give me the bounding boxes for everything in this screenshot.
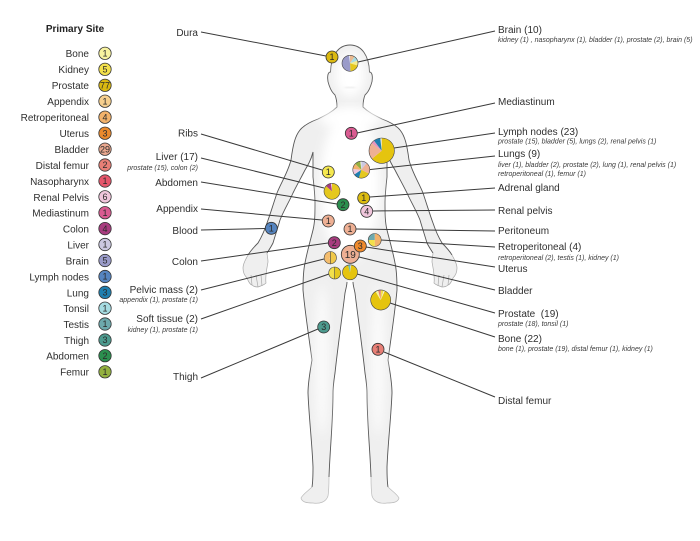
marker: renal pelvis: [361, 205, 373, 217]
label: prostate: Prostate (19): [498, 309, 559, 320]
legend item: distal femur: 2: [102, 160, 108, 170]
legend item: lymph nodes: [29, 270, 111, 284]
label: blood: Blood: [172, 226, 198, 237]
legend item: brain: [66, 254, 111, 268]
legend item: uterus: Uterus: [60, 129, 89, 140]
label: soft tissue: [128, 314, 198, 334]
legend item: femur: 1: [102, 367, 108, 377]
legend item: lung: [67, 286, 111, 300]
legend item: bone: [66, 47, 111, 60]
legend item: testis: [63, 318, 111, 331]
marker: colon: [328, 237, 340, 249]
label: liver: Liver (17): [156, 152, 198, 163]
legend item: retroperitoneal: 4: [102, 112, 108, 122]
marker: appendix: [322, 215, 334, 227]
marker: distal femur: 1: [375, 344, 381, 354]
legend item: lymph nodes: Lymph nodes: [29, 272, 89, 284]
label: adrenal gland: Adrenal gland: [498, 183, 560, 194]
marker: thigh: [318, 321, 330, 333]
leader lines: [201, 31, 495, 397]
marker: bladder: 19: [345, 250, 356, 261]
label: bone: [498, 334, 653, 353]
legend item: uterus: [60, 127, 111, 140]
legend item: colon: 4: [102, 224, 108, 234]
label: retroperitoneal: retroperitoneal (2), testis (1), kidney (1): [498, 255, 619, 262]
legend item: tonsil: 1: [102, 303, 108, 313]
label: retroperitoneal: [498, 242, 619, 262]
legend item: tonsil: Tonsil: [63, 304, 89, 315]
label: ribs: Ribs: [178, 128, 198, 140]
legend title: Primary Site: [46, 24, 105, 35]
legend item: colon: [63, 222, 111, 236]
label: brain: [498, 25, 693, 44]
legend item: mediastinum: 1: [102, 208, 108, 218]
marker: adrenal gland: [358, 192, 370, 204]
legend item: colon: Colon: [63, 224, 89, 236]
legend item: kidney: Kidney: [58, 65, 89, 76]
left labels: [119, 28, 198, 383]
marker: dura: 1: [329, 52, 335, 62]
label: appendix: Appendix: [156, 204, 198, 215]
legend item: prostate: [52, 79, 111, 92]
marker: blood: 1: [269, 224, 274, 234]
legend item: prostate: 77: [100, 80, 110, 90]
legend item: thigh: Thigh: [64, 336, 89, 347]
marker: thigh: 3: [321, 322, 326, 332]
legend item: bladder: 29: [100, 144, 110, 154]
marker: ribs: [322, 166, 334, 178]
legend item: lung: Lung: [67, 288, 89, 300]
label: abdomen: Abdomen: [155, 178, 198, 189]
marker: renal pelvis: 4: [364, 206, 369, 216]
legend item: appendix: 1: [102, 96, 108, 106]
pie: brain: [342, 55, 358, 71]
legend item: renal pelvis: [33, 191, 111, 204]
legend item: thigh: [64, 334, 111, 347]
marker: mediastinum: [345, 127, 357, 139]
legend item: brain: Brain: [66, 256, 89, 268]
marker: distal femur: [372, 343, 384, 355]
label: prostate: prostate (18), tonsil (1): [497, 321, 568, 328]
legend item: liver: 1: [102, 240, 108, 250]
label: soft tissue: kidney (1), prostate (1): [128, 327, 198, 334]
label: bladder: Bladder: [498, 286, 533, 297]
legend item: bone: 1: [102, 48, 108, 58]
legend item: appendix: Appendix: [47, 97, 89, 108]
legend item: femur: Femur: [60, 368, 90, 378]
label: pelvic mass: [119, 285, 198, 304]
numbered site markers: [265, 51, 384, 355]
marker: peritoneum: 1: [347, 224, 353, 234]
legend item: mediastinum: [32, 206, 111, 220]
label: prostate: [497, 309, 568, 328]
label: pelvic mass: appendix (1), prostate (1): [119, 297, 198, 304]
label: pelvic mass: Pelvic mass (2): [130, 285, 198, 296]
legend item: bladder: Bladder: [55, 145, 90, 156]
pie: retroperitoneal: [368, 234, 381, 246]
marker: mediastinum: 1: [349, 128, 354, 138]
legend item: brain: 5: [102, 256, 108, 266]
marker: bladder: [341, 245, 359, 263]
marker: peritoneum: [344, 223, 356, 235]
legend item: retroperitoneal: Retroperitoneal: [21, 113, 89, 124]
legend item: mediastinum: Mediastinum: [32, 208, 89, 220]
legend item: renal pelvis: Renal Pelvis: [33, 193, 89, 204]
label: lungs: retroperitoneal (1), femur (1): [498, 171, 586, 178]
label: lymph nodes: [497, 127, 656, 146]
pie: bone: [367, 287, 394, 313]
label: liver: [126, 152, 198, 172]
legend item: lymph nodes: 1: [102, 272, 108, 282]
legend item: testis: Testis: [63, 320, 89, 331]
legend item: abdomen: [46, 350, 111, 362]
legend item: nasopharynx: Nasopharynx: [30, 177, 89, 188]
legend item: liver: [67, 238, 111, 252]
legend item: prostate: Prostate: [52, 81, 89, 92]
label: lymph nodes: prostate (15), bladder (5), lungs (2), renal pelvis (1): [497, 138, 656, 146]
legend item: distal femur: Distal femur: [36, 161, 90, 172]
pie: lymph nodes: [369, 138, 394, 163]
label: retroperitoneal: Retroperitoneal (4): [498, 242, 581, 253]
marker: abdomen: 2: [340, 200, 346, 210]
legend item: distal femur: [36, 159, 111, 172]
marker: blood: [265, 222, 277, 234]
label: peritoneum: Peritoneum: [498, 226, 549, 237]
label: thigh: Thigh: [173, 372, 198, 383]
pie: lungs: [353, 161, 370, 178]
label: renal pelvis: Renal pelvis: [498, 206, 552, 217]
label: brain: kidney (1) , nasopharynx (1), bladder (1), prostate (2), brain (5): [498, 37, 693, 44]
legend item: nasopharynx: [30, 175, 111, 188]
legend item: bladder: [55, 143, 111, 156]
legend item: abdomen: 2: [102, 351, 108, 361]
label: lymph nodes: Lymph nodes (23): [498, 127, 578, 138]
marker: appendix: 1: [326, 216, 331, 226]
label: lungs: liver (1), bladder (2), prostate (2), lung (1), renal pelvis (1): [498, 162, 676, 169]
legend item: tonsil: [63, 302, 111, 315]
legend item: testis: 1: [102, 319, 108, 329]
legend item: uterus: 3: [102, 128, 108, 138]
label: mediastinum: Mediastinum: [498, 97, 555, 108]
marker: adrenal gland: 1: [361, 193, 366, 203]
legend item: thigh: 3: [102, 335, 108, 345]
label: distal femur: Distal femur: [498, 396, 552, 407]
label: lungs: Lungs (9): [498, 149, 540, 160]
legend item: liver: Liver: [67, 240, 90, 252]
legend item: femur: [60, 366, 111, 378]
label: soft tissue: Soft tissue (2): [136, 314, 198, 325]
marker: uterus: [354, 240, 366, 252]
pie: soft tissue: [329, 267, 341, 279]
label: bone: bone (1), prostate (19), distal femur (1), kidney (1): [498, 346, 653, 353]
label: dura: Dura: [176, 28, 198, 39]
pie charts: [324, 55, 394, 313]
label: colon: Colon: [172, 257, 198, 268]
right labels: [497, 25, 693, 407]
label: liver: prostate (15), colon (2): [126, 165, 198, 172]
marker: dura: [326, 51, 338, 63]
marker: ribs: 1: [326, 167, 331, 177]
legend: primary site: [21, 24, 111, 378]
label: uterus: Uterus: [498, 264, 527, 275]
legend item: appendix: [47, 95, 111, 108]
legend item: retroperitoneal: [21, 111, 111, 124]
label: brain: Brain (10): [498, 25, 542, 36]
label: bone: Bone (22): [498, 334, 542, 345]
pie: pelvic mass: [324, 252, 336, 264]
legend item: lung: 3: [102, 288, 108, 298]
marker: colon: 2: [332, 238, 337, 248]
body silhouette: [243, 45, 457, 503]
legend item: abdomen: Abdomen: [46, 352, 89, 362]
marker: abdomen: [337, 199, 349, 211]
pie: prostate: [341, 264, 359, 281]
legend item: renal pelvis: 6: [102, 192, 108, 202]
legend item: nasopharynx: 1: [102, 176, 108, 186]
pie: liver: [324, 183, 340, 199]
legend item: bone: Bone: [66, 49, 89, 60]
marker: uterus: 3: [358, 241, 363, 251]
legend item: kidney: 5: [102, 64, 108, 74]
legend item: kidney: [58, 63, 111, 76]
label: lungs: [498, 149, 676, 178]
